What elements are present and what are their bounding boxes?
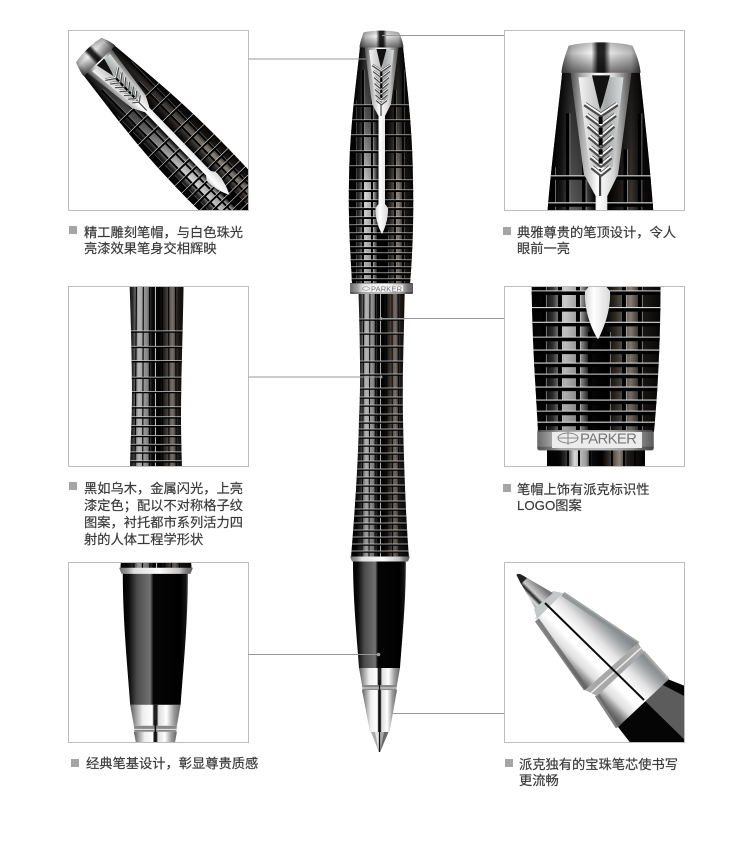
panel: logo ring detail (504, 286, 685, 467)
central pen (345, 31, 417, 752)
leader line: engraved cap (248, 58, 366, 60)
center seam (545, 603, 644, 700)
caption: cap top (503, 225, 676, 256)
caption: barrel finish: 图案，衬托都市系列活力四 (84, 514, 243, 530)
panel: rollerball tip detail (504, 562, 690, 745)
caption: pen base: 经典笔基设计，彰显尊贵质感 (86, 755, 258, 771)
caption: cap top: 典雅尊贵的笔顶设计，令人 (517, 225, 676, 240)
caption: rollerball tip (505, 756, 678, 788)
leader line: rollerball tip (392, 712, 504, 714)
caption: engraved cap (69, 224, 243, 256)
caption: barrel finish: 射的人体工程学形状 (84, 532, 203, 547)
lower chrome body (597, 652, 668, 727)
pen barrel (348, 275, 412, 560)
panel: pen base detail (68, 562, 249, 743)
leader line: pen base (248, 653, 380, 656)
caption: barrel finish (69, 480, 243, 547)
caption: rollerball tip: 派克独有的宝珠笔芯使书写 (519, 756, 678, 772)
pen logo ring: PARKER (371, 284, 403, 294)
logo: Parker emblem and wordmark: PARKER (580, 430, 637, 448)
leader line: cap top (382, 34, 504, 36)
pen cap (345, 31, 417, 285)
pen logo ring (350, 283, 413, 294)
caption: barrel finish: 黑如乌木，金属闪光，上亮 (84, 480, 243, 496)
groove (585, 643, 644, 696)
caption: logo ring (503, 482, 650, 513)
caption: engraved cap: 精工雕刻笔帽，与白色珠光 (84, 224, 243, 240)
caption: logo ring: 笔帽上饰有派克标识性 (517, 482, 650, 497)
caption: barrel finish: 漆定色；配以不对称格子纹 (84, 497, 243, 514)
caption: engraved cap: 亮漆效果笔身交相辉映 (84, 240, 217, 256)
panel: barrel detail (68, 286, 249, 467)
black grip section (618, 678, 684, 742)
leader line: logo ring (380, 317, 504, 320)
pen section and tip (350, 556, 410, 752)
logo: Parker emblem and wordmark (558, 431, 636, 445)
caption: logo ring: LOGO图案 (517, 498, 582, 513)
barrel stub below ring (547, 450, 645, 466)
panel: engraved cap detail (68, 30, 249, 211)
leader line: barrel (248, 376, 382, 378)
caption: rollerball tip: 更流畅 (519, 773, 559, 788)
upper chrome body (535, 593, 638, 690)
panel: cap top detail (504, 30, 685, 211)
caption: cap top: 眼前一亮 (517, 240, 570, 256)
collar (534, 591, 563, 619)
